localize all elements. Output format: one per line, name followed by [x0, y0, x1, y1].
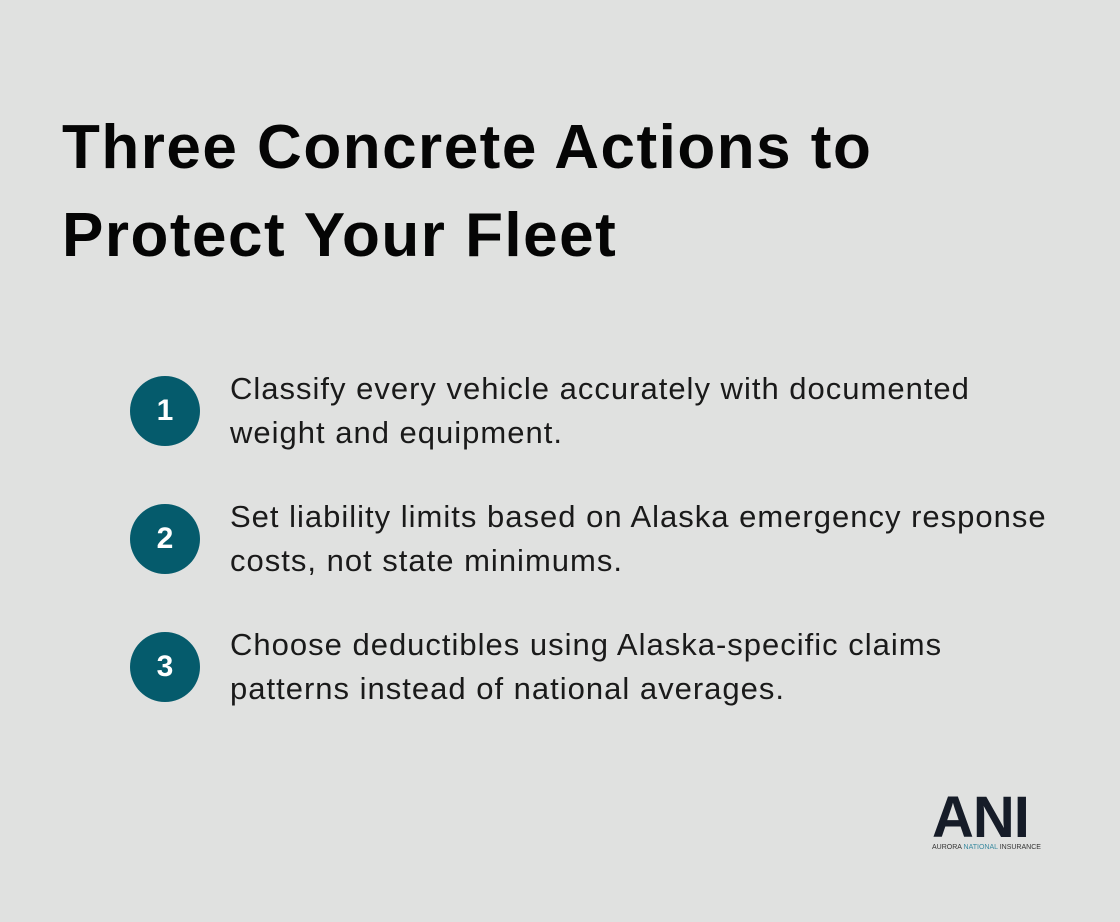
text 2: Set liability limits based on Alaska emergency response: [230, 499, 1047, 534]
title: [62, 113, 872, 270]
text 2: [230, 499, 1047, 578]
icon: number 2: 2: [157, 522, 173, 555]
title: Protect Your Fleet: [62, 201, 617, 270]
item 3: [130, 627, 942, 706]
text 1: Classify every vehicle accurately with documented: [230, 371, 970, 406]
text 3: Choose deductibles using Alaska-specific claims: [230, 627, 942, 662]
icon: number 3: 3: [157, 650, 173, 683]
text 1: [230, 371, 970, 450]
item 1: [130, 371, 970, 450]
text 3: [230, 627, 942, 706]
title: Three Concrete Actions to: [62, 113, 872, 182]
logo: ANI: [932, 785, 1029, 850]
icon: number 2: [130, 504, 200, 574]
icon: number 1: 1: [157, 394, 173, 427]
logo: AURORA NATIONAL INSURANCE: [932, 844, 1041, 851]
text 3: patterns instead of national averages.: [230, 671, 785, 706]
item 2: [130, 499, 1047, 578]
icon: number 3: [130, 632, 200, 702]
text 1: weight and equipment.: [230, 415, 563, 450]
icon: number 1: [130, 376, 200, 446]
text 2: costs, not state minimums.: [230, 543, 623, 578]
